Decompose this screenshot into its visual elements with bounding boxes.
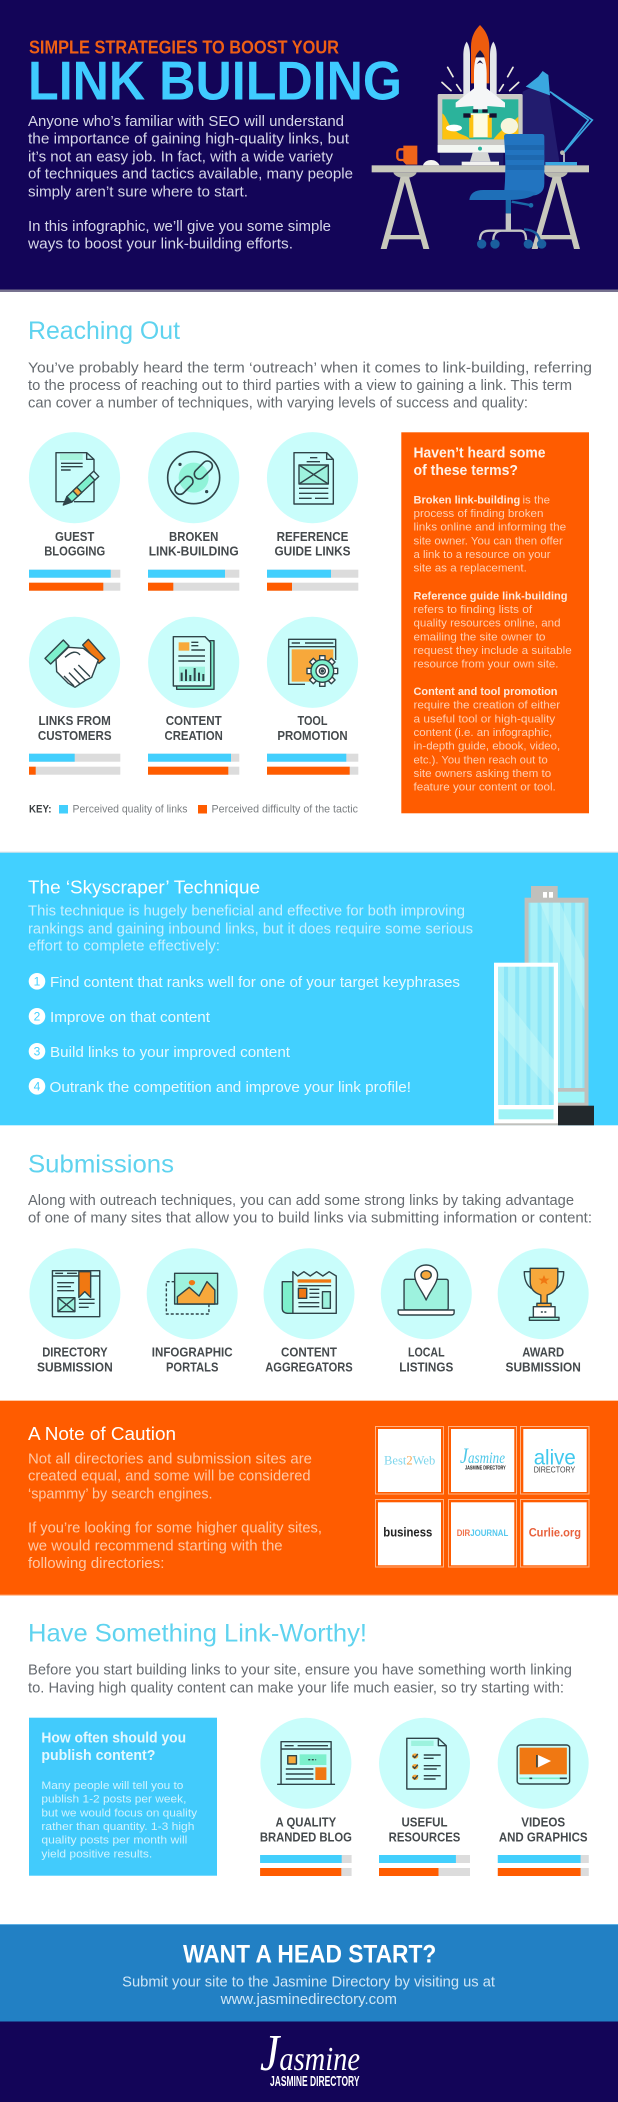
panel: have something link-worthy: [28, 1620, 589, 1876]
callout body: rather than quantity. 1-3 high: [41, 1821, 194, 1833]
term: reference guide link-building: resource from your own site.: [414, 659, 558, 671]
label: LOCAL: [408, 1346, 445, 1360]
intro text: of techniques and tactics available, many people: [28, 167, 353, 183]
body text: ‘spammy’ by search engines.: [28, 1486, 212, 1502]
body text: If you’re looking for some higher quality sites,: [28, 1521, 322, 1537]
body text: rankings and gaining inbound links, but it does require some serious: [28, 921, 473, 937]
body text: [28, 904, 473, 955]
body text: effort to complete effectively:: [28, 939, 220, 955]
legend: Perceived difficulty of the tactic: [212, 804, 358, 816]
icon: newspaper page: [294, 453, 333, 504]
label: TOOL: [298, 714, 328, 728]
callout body: [41, 1780, 198, 1860]
icon: laptop with map pin: [398, 1265, 454, 1315]
logo: Jasmine Directory: Jasmine: [260, 2025, 360, 2082]
label: USEFUL: [402, 1816, 448, 1830]
body text: Submit your site to the Jasmine Directory by visiting us at: [122, 1975, 495, 1991]
label: CUSTOMERS: [38, 729, 112, 743]
label: [389, 1816, 460, 1845]
item: local listings: [381, 1248, 472, 1375]
label: GUEST: [55, 530, 95, 544]
logo: Jasmine Directory: JASMINE DIRECTORY: [270, 2073, 360, 2090]
bars: [379, 1855, 470, 1876]
intro text: Anyone who’s familiar with SEO will understand: [28, 114, 344, 130]
term: reference guide link-building: quality resources online, and: [414, 618, 560, 630]
term: content and tool promotion: require the creation of either: [414, 700, 561, 712]
icon: video player: [517, 1745, 570, 1784]
icon: browser with gear: [289, 639, 338, 686]
label: DIRECTORY: [42, 1346, 108, 1360]
label: SUBMISSION: [506, 1361, 581, 1375]
body text: we would recommend starting with the: [27, 1539, 283, 1555]
icon: image frame: [166, 1273, 218, 1314]
item: tool promotion: [267, 617, 358, 775]
term: broken link-building: process of finding broken: [414, 508, 544, 520]
panel: header: [0, 0, 618, 292]
item: award submission: [498, 1248, 589, 1375]
logo: DirJournal: [448, 1500, 516, 1567]
item: infographic portals: [147, 1248, 238, 1375]
label: REFERENCE: [277, 530, 348, 544]
item: links from customers: [29, 617, 120, 775]
panel: reaching out: [28, 317, 592, 816]
label: VIDEOS: [521, 1816, 565, 1830]
heading: Have Something Link-Worthy!: [28, 1620, 367, 1648]
logo grid: [376, 1426, 589, 1567]
label: LINK-BUILDING: [149, 545, 239, 559]
label: [277, 714, 348, 743]
item: reference guide links: [267, 432, 358, 591]
steps list: Find content that ranks well for one of your target keyphrases: [50, 975, 460, 991]
item: quality branded blog: [260, 1718, 352, 1876]
icon: newspaper: [282, 1272, 336, 1313]
body text: www.jasminedirectory.com: [220, 1992, 397, 2008]
label: [38, 714, 112, 743]
callout body: publish 1-2 posts per week,: [41, 1794, 186, 1806]
intro text: In this infographic, we’ll give you some simple: [28, 219, 331, 235]
callout body: yield positive results.: [41, 1848, 152, 1860]
intro paragraph: of one of many sites that allow you to build links via submitting information or content:: [28, 1210, 592, 1226]
item: content creation: [148, 617, 239, 775]
label: [37, 1346, 113, 1375]
logo: Jasmine Directory: Jasmine: [460, 1443, 505, 1468]
intro text: [27, 114, 353, 252]
callout heading: How often should you: [41, 1731, 186, 1747]
label: [274, 530, 350, 559]
body text: following directories:: [28, 1556, 164, 1572]
label: [506, 1346, 581, 1375]
label: [499, 1816, 588, 1845]
intro text: the importance of gaining high-quality links, but: [28, 132, 349, 148]
title: LINK BUILDING: [28, 49, 402, 111]
intro paragraph: [28, 1193, 592, 1226]
heading: A Note of Caution: [28, 1423, 176, 1444]
icon: broken chain: [168, 452, 220, 504]
term: broken link-building: site as a replacement.: [414, 563, 527, 575]
label: [260, 1816, 352, 1845]
logo: business: [376, 1500, 444, 1567]
intro paragraph: to the process of reaching out to third parties with a view to gaining a link. This term: [28, 378, 572, 394]
logo: business: business: [383, 1525, 432, 1540]
label: BLOGGING: [44, 545, 105, 559]
steps list: Build links to your improved content: [50, 1045, 290, 1061]
logo: Best2Web: [376, 1426, 444, 1494]
logo: alive directory: [520, 1426, 589, 1494]
term: reference guide link-building: [414, 590, 572, 671]
heading: WANT A HEAD START?: [183, 1942, 436, 1969]
intro text: ways to boost your link-building efforts.: [27, 236, 293, 252]
heading: Reaching Out: [28, 317, 180, 345]
label: CONTENT: [166, 714, 222, 728]
logo: Curlie.org: [520, 1500, 589, 1567]
logo: Jasmine Directory: JASMINE DIRECTORY: [465, 1466, 506, 1472]
intro paragraph: You’ve probably heard the term ‘outreach’ when it comes to link-building, referring: [28, 360, 592, 376]
illustration: skyscraper buildings: [494, 886, 594, 1125]
term: content and tool promotion: feature your content or tool.: [414, 782, 556, 794]
term: content and tool promotion: [414, 686, 561, 794]
item: content aggregators: [264, 1248, 354, 1375]
term: content and tool promotion: site owners asking them to: [414, 768, 551, 780]
illustration: desk with rocket launching from monitor: [372, 25, 592, 249]
body text: created equal, and some will be considered: [28, 1469, 311, 1485]
label: RESOURCES: [389, 1831, 460, 1845]
item: broken link-building: [148, 432, 239, 591]
logo: Jasmine Directory: [448, 1426, 516, 1494]
legend: KEY:: [29, 804, 52, 816]
logo: alive directory: DIRECTORY: [534, 1465, 576, 1474]
term: content and tool promotion: etc.). You then reach out to: [414, 754, 548, 766]
steps list: Outrank the competition and improve your link profile!: [50, 1080, 411, 1096]
term: broken link-building: a link to a resource on your: [414, 549, 551, 561]
item: guest blogging: [29, 432, 120, 591]
label: BROKEN: [169, 530, 218, 544]
logo: DirJournal: DIRJOURNAL: [457, 1528, 509, 1538]
bars: [260, 1855, 352, 1876]
term: broken link-building: links online and informing the: [414, 522, 566, 534]
callout heading: [41, 1731, 186, 1764]
legend: [29, 804, 358, 816]
bars: [267, 570, 358, 591]
steps list: Improve on that content: [50, 1010, 210, 1026]
label: INFOGRAPHIC: [152, 1346, 233, 1360]
logo: Best2Web: Best2Web: [384, 1453, 435, 1468]
term: reference guide link-building: emailing the site owner to: [414, 631, 546, 643]
intro paragraph: Along with outreach techniques, you can add some strong links by taking advantage: [28, 1193, 574, 1209]
steps list: [29, 973, 460, 1096]
icon: directory page: [52, 1271, 100, 1317]
callout: terms glossary: [401, 432, 589, 813]
bars: [498, 1855, 589, 1876]
label: BRANDED BLOG: [260, 1831, 352, 1845]
term: reference guide link-building: request they include a suitable: [414, 645, 572, 657]
term: broken link-building: [414, 494, 566, 575]
label: [265, 1346, 353, 1375]
icon: document and pen: [56, 453, 99, 508]
intro paragraph: can cover a number of techniques, with varying levels of success and quality:: [28, 395, 528, 411]
callout: publishing frequency: [29, 1718, 217, 1876]
label: A QUALITY: [276, 1816, 337, 1830]
body text: Not all directories and submission sites are: [28, 1451, 312, 1467]
intro paragraph: Before you start building links to your site, ensure you have something worth linking: [28, 1663, 572, 1679]
label: [399, 1346, 453, 1375]
panel: skyscraper technique: [0, 852, 618, 1125]
callout heading: Haven’t heard some: [414, 446, 546, 462]
panel: call to action: [0, 1924, 618, 2022]
label: LINKS FROM: [39, 714, 111, 728]
label: [44, 530, 105, 559]
term: content and tool promotion: content (i.e. an infographic,: [414, 727, 552, 739]
item: directory submission: [29, 1248, 120, 1375]
label: [165, 714, 223, 743]
body text: This technique is hugely beneficial and effective for both improving: [28, 904, 465, 920]
icon: blog browser: [277, 1742, 335, 1784]
label: AGGREGATORS: [265, 1361, 353, 1375]
label: PORTALS: [166, 1361, 218, 1375]
label: LISTINGS: [399, 1361, 453, 1375]
body text: [122, 1975, 495, 2008]
steps list: 4: [34, 1080, 41, 1094]
label: PROMOTION: [277, 729, 348, 743]
term: content and tool promotion: Content and tool promotion: [414, 686, 558, 698]
bars: [267, 754, 358, 775]
legend: Perceived quality of links: [72, 804, 188, 816]
callout heading: of these terms?: [414, 463, 518, 479]
item: useful resources: [379, 1718, 470, 1876]
panel: a note of caution: [0, 1400, 618, 1596]
callout body: but we would focus on quality: [41, 1807, 198, 1819]
heading: The ‘Skyscraper’ Technique: [28, 876, 260, 897]
subtitle: SIMPLE STRATEGIES TO BOOST YOUR: [29, 36, 339, 58]
icon: checklist: [407, 1738, 446, 1789]
callout heading: [414, 446, 546, 479]
intro text: simply aren’t sure where to start.: [28, 184, 248, 200]
callout heading: publish content?: [41, 1748, 156, 1764]
term: content and tool promotion: a useful tool or high-quality: [414, 713, 556, 725]
bars: [148, 754, 239, 775]
icon: trophy: [524, 1268, 564, 1320]
steps list: 1: [34, 974, 41, 988]
label: CONTENT: [281, 1346, 337, 1360]
label: [152, 1346, 233, 1375]
intro paragraph: [28, 360, 592, 411]
label: [149, 530, 239, 559]
logo: Curlie.org: Curlie.org: [529, 1528, 581, 1540]
label: SUBMISSION: [37, 1361, 113, 1375]
item: videos and graphics: [498, 1718, 589, 1876]
label: GUIDE LINKS: [274, 545, 350, 559]
steps list: 2: [34, 1010, 41, 1024]
bars: [29, 754, 120, 775]
term: broken link-building: Broken link-building: [414, 494, 520, 506]
heading: Submissions: [28, 1150, 174, 1178]
icon: handshake: [45, 639, 105, 687]
intro paragraph: to. Having high quality content can make your life much easier, so try starting with:: [28, 1680, 564, 1696]
label: CREATION: [165, 729, 223, 743]
callout body: quality posts per month will: [41, 1835, 187, 1847]
term: content and tool promotion: in-depth guide, ebook, video,: [414, 741, 560, 753]
icon: report pages: [173, 637, 214, 689]
panel: submissions: [28, 1150, 592, 1375]
label: AND GRAPHICS: [499, 1831, 588, 1845]
logo: alive directory: alive: [534, 1446, 576, 1469]
term: broken link-building: site owner. You can then offer: [414, 535, 563, 547]
callout body: Many people will tell you to: [41, 1780, 183, 1792]
body text: [27, 1451, 322, 1572]
term: broken link-building: is the: [522, 494, 550, 506]
term: reference guide link-building: refers to finding lists of: [414, 604, 533, 616]
steps list: 3: [34, 1044, 41, 1058]
bars: [29, 570, 120, 591]
panel: footer: [0, 2022, 618, 2102]
bars: [148, 570, 239, 591]
term: reference guide link-building: Reference guide link-building: [414, 590, 568, 602]
intro text: it’s not an easy job. In fact, with a wide variety: [28, 149, 334, 165]
intro paragraph: [28, 1663, 572, 1696]
label: AWARD: [522, 1346, 564, 1360]
